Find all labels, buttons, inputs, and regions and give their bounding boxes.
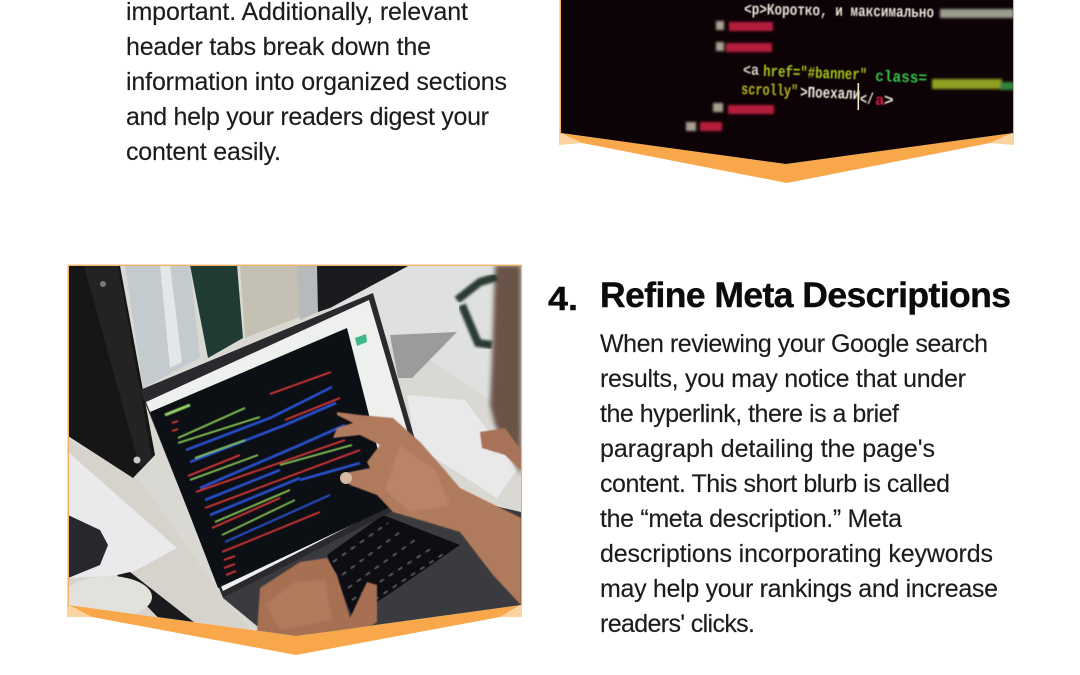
text block: section 4 paragraph: descriptions incorporating keywords: [600, 540, 993, 568]
upper hand and arm: [333, 412, 521, 605]
photo: code screen: <a: [743, 62, 759, 80]
document on desk: [407, 395, 517, 498]
text block: section 3 paragraph: and help your readers digest your: [126, 103, 489, 131]
text block: section 4 paragraph: the hyperlink, there is a brief: [600, 400, 899, 428]
laptop lid: [140, 293, 430, 598]
number: 4.: 4.: [548, 280, 578, 317]
photo: code screen: >: [884, 92, 894, 110]
binder: [68, 266, 155, 478]
photo: code screen: a: [875, 92, 885, 110]
text block: section 4 paragraph: readers' clicks.: [600, 610, 755, 638]
column: [125, 265, 200, 388]
photo: code screen: <p>Коротко, и максимально: [744, 1, 934, 22]
code lines: [165, 372, 360, 575]
photo: laptop scene: [64, 265, 522, 640]
text block: section 4 paragraph: content. This short blurb is called: [600, 470, 950, 498]
photo: code screen: href="#banner": [763, 63, 867, 85]
text block: section 3 paragraph: header tabs break down the: [126, 33, 431, 61]
ribbon: bottom image orange edge: [67, 265, 522, 655]
photo: code screen: </: [860, 91, 874, 109]
laptop base: [223, 506, 521, 634]
text block: section 3 paragraph: [126, 0, 507, 166]
paper, pad, mouse: [68, 452, 177, 578]
back monitor and stand: [317, 265, 410, 312]
photo: code screen: class=: [875, 68, 927, 88]
text block: section 4 paragraph: [600, 330, 998, 638]
photo: code screen: >Поехали: [800, 84, 860, 104]
text block: section 4 paragraph: paragraph detailing the page's: [600, 435, 935, 463]
ribbon: top image orange edge: [559, 0, 1014, 183]
image: blurred code on dark screen with orange ribbon: [559, 0, 1014, 183]
text block: section 3 paragraph: content easily.: [126, 138, 281, 166]
image: developer pointing at code on a laptop with orange ribbon: [64, 265, 522, 655]
text block: section 4 paragraph: the “meta description.” Meta: [600, 505, 902, 533]
text block: section 4 paragraph: results, you may notice that under: [600, 365, 966, 393]
green panel: [190, 265, 243, 358]
heading: Refine Meta Descriptions: Refine Meta Descriptions: [600, 275, 1011, 315]
text block: section 4 paragraph: may help your rankings and increase: [600, 575, 998, 603]
text block: section 4 paragraph: When reviewing your Google search: [600, 330, 988, 358]
photo: code screen: [560, 0, 1014, 170]
person's head and glasses: [490, 265, 521, 475]
lower hand: [257, 558, 377, 640]
text block: section 3 paragraph: information into organized sections: [126, 68, 507, 96]
photo: code screen: scrolly": [741, 81, 798, 101]
keyboard: [327, 515, 460, 618]
